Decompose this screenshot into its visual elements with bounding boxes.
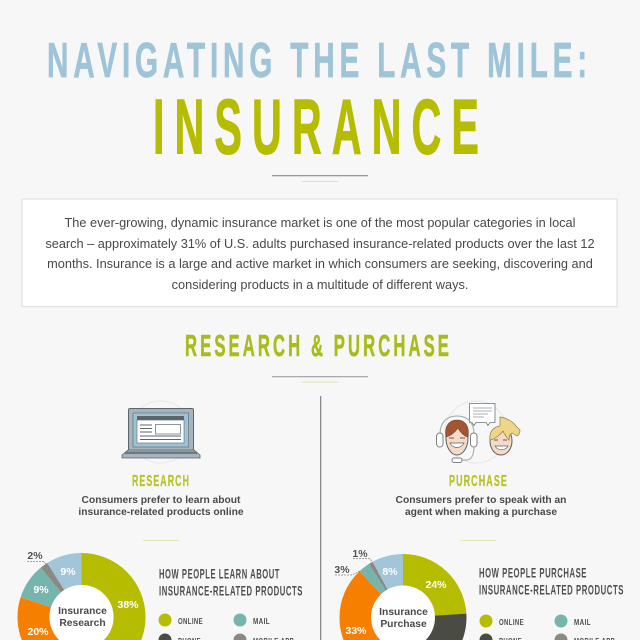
chart: insurance purchase donut: 24% bbox=[425, 579, 447, 591]
chart: insurance purchase donut: Purchase bbox=[380, 619, 427, 630]
chart: insurance purchase donut: 3% bbox=[334, 564, 350, 576]
panel: introduction: search – approximately 31% of U.S. adults purchased insurance-related products over the last 12 bbox=[45, 236, 595, 251]
panel: introduction: considering products in a multitude of different ways. bbox=[172, 277, 468, 292]
heading: how people purchase bbox=[479, 564, 624, 598]
text: research summary: insurance-related products online bbox=[78, 507, 244, 518]
chart: insurance purchase donut: 8% bbox=[382, 566, 398, 578]
legend: purchase: ONLINE bbox=[499, 617, 524, 627]
legend: research: ONLINE bbox=[178, 616, 203, 626]
chart: insurance research donut: Insurance bbox=[58, 606, 107, 617]
text: purchase summary bbox=[396, 495, 566, 518]
heading: purchase: PURCHASE bbox=[449, 473, 508, 490]
chart: insurance research donut bbox=[27, 550, 139, 640]
legend: purchase bbox=[480, 614, 615, 640]
text: research summary: Consumers prefer to learn about bbox=[82, 495, 241, 506]
chart: insurance purchase donut: 1% bbox=[352, 548, 368, 560]
heading: research: RESEARCH bbox=[132, 473, 190, 490]
panel: introduction: The ever-growing, dynamic insurance market is one of the most popular categories in local bbox=[65, 215, 575, 230]
icon: agent and customer bbox=[436, 401, 520, 463]
chart: insurance research donut: 9% bbox=[33, 584, 49, 596]
heading: how people learn: HOW PEOPLE LEARN ABOUT bbox=[159, 566, 280, 582]
chart: insurance purchase donut: 33% bbox=[345, 625, 367, 637]
chart: insurance purchase donut: Insurance bbox=[379, 607, 428, 618]
text: purchase summary: agent when making a purchase bbox=[405, 507, 557, 518]
chart: insurance research donut: 38% bbox=[117, 599, 139, 611]
icon: laptop bbox=[122, 401, 200, 463]
panel: introduction: months. Insurance is a large and active market in which consumers are seeking, discovering and bbox=[47, 256, 593, 271]
legend: research bbox=[158, 614, 294, 640]
chart: insurance research donut: 9% bbox=[60, 566, 76, 578]
legend: purchase: MAIL bbox=[574, 617, 591, 627]
chart: insurance research donut: Research bbox=[59, 618, 106, 629]
legend: research: MAIL bbox=[253, 616, 270, 626]
heading: how people learn bbox=[159, 566, 303, 598]
chart: insurance purchase donut bbox=[334, 548, 450, 640]
text: purchase summary: Consumers prefer to speak with an bbox=[396, 495, 566, 506]
heading: how people learn: INSURANCE-RELATED PRODUCTS bbox=[159, 582, 303, 598]
chart: insurance research donut: 20% bbox=[27, 626, 49, 638]
chart: insurance research donut: 2% bbox=[27, 550, 43, 562]
text: research summary bbox=[78, 495, 244, 518]
panel: introduction bbox=[22, 199, 617, 306]
